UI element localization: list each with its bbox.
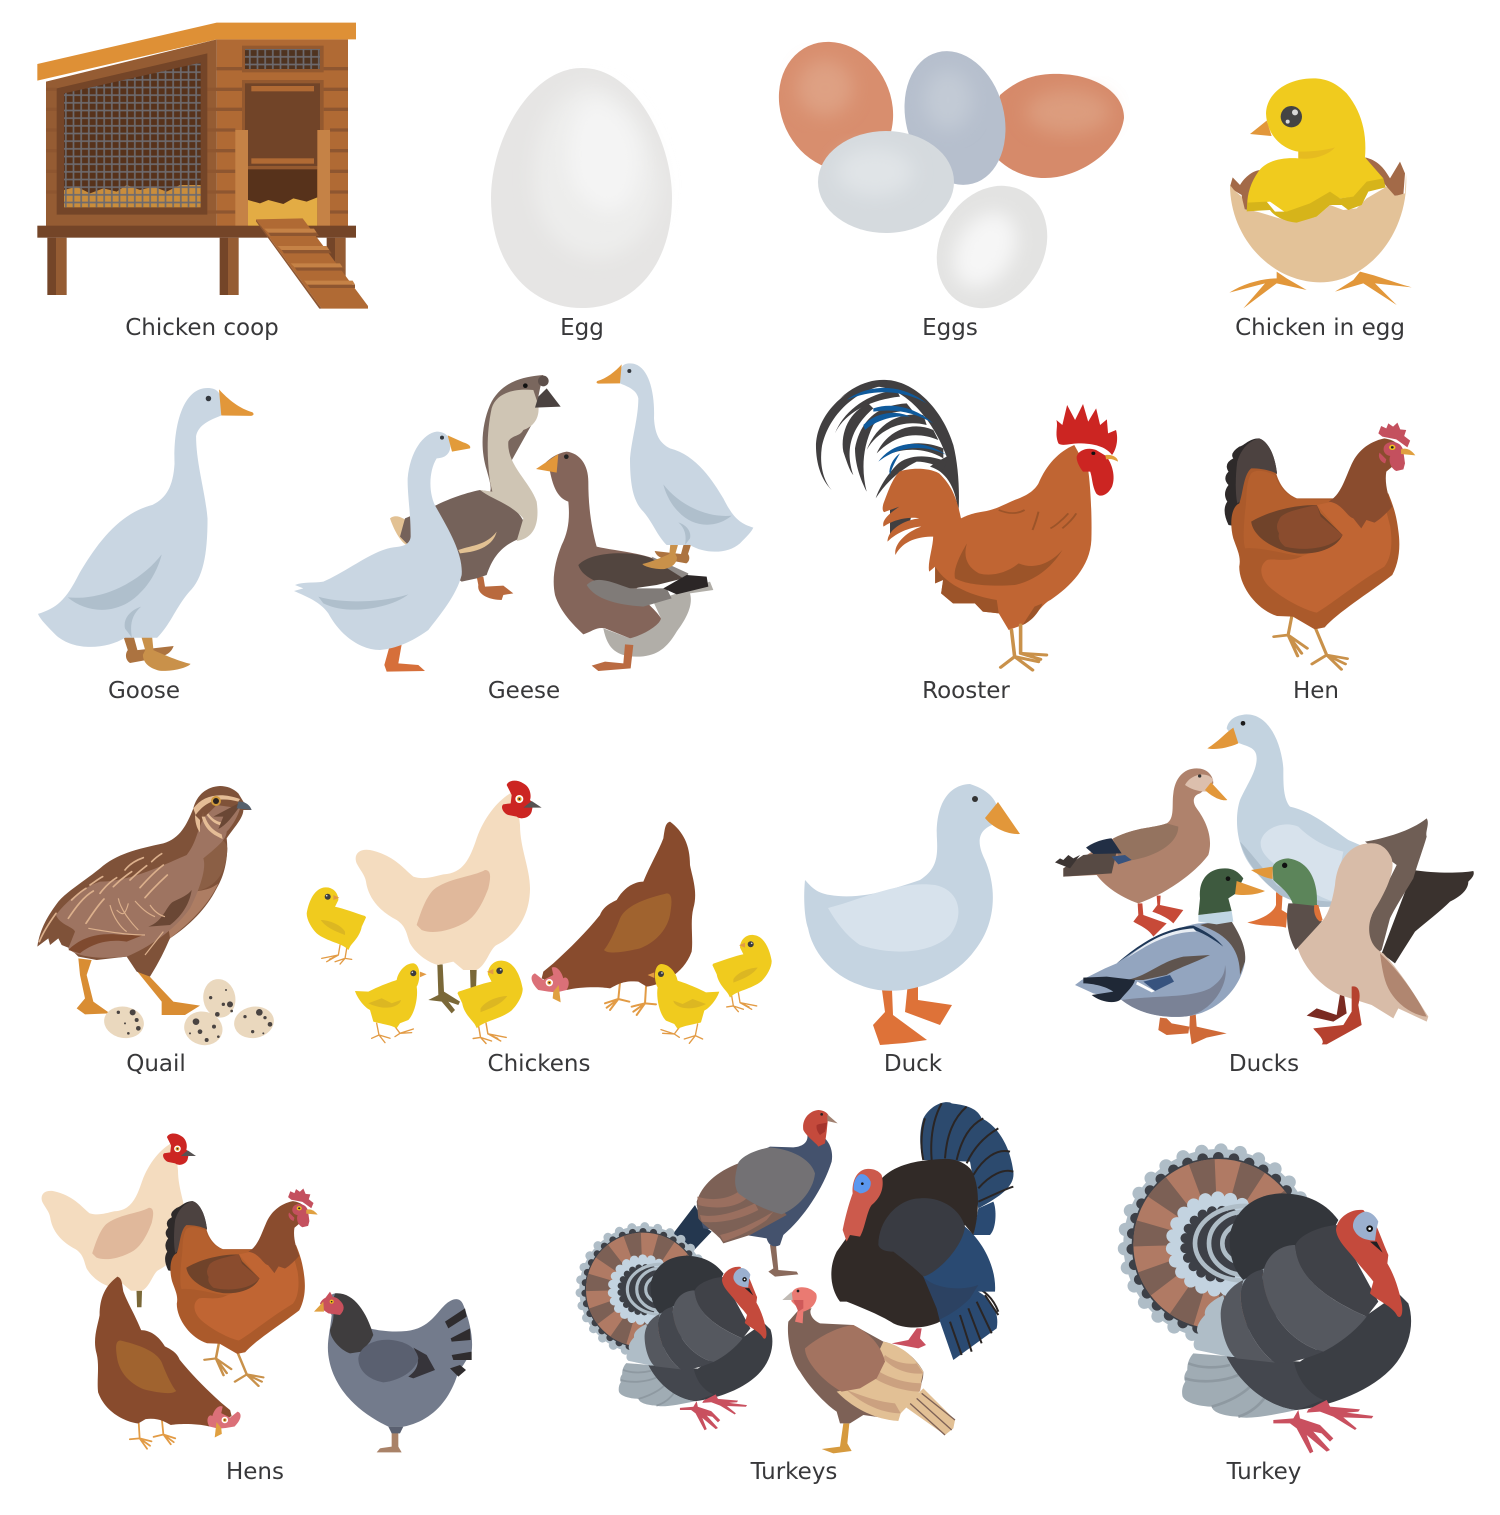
panel: duck [804,784,1020,1077]
panel: chicken in egg [1229,78,1412,341]
label: chicken in egg: Chicken in egg [1235,315,1405,341]
panel: turkeys [579,1102,1013,1485]
rooster [816,380,1118,670]
chick: far left [307,887,366,964]
label: turkeys: Turkeys [750,1459,837,1485]
label: eggs: Eggs [922,315,978,341]
white goose [38,388,254,671]
label: hen: Hen [1293,678,1339,704]
label: rooster: Rooster [922,678,1010,704]
panel: chicken coop [37,23,368,341]
dark turkey, small [579,1226,772,1430]
chick: front left [355,963,427,1043]
panel: rooster [816,380,1118,704]
quail with eggs [37,786,276,1049]
cream hen [42,1133,196,1327]
grey-winged turkey [673,1110,838,1277]
label: egg: Egg [560,315,604,341]
tan turkey [782,1287,955,1453]
label: turkey: Turkey [1226,1459,1301,1485]
dark turkey [1123,1149,1411,1453]
coop illustration [37,23,368,309]
panel: geese [294,363,753,704]
flock of geese [294,363,753,672]
panel: turkey [1123,1149,1411,1485]
label: goose: Goose [108,678,180,704]
panel: goose [38,388,254,704]
panel: quail [37,786,276,1077]
chick: front centre [457,961,523,1044]
grey hen [314,1292,472,1452]
label: chicken coop: Chicken coop [125,315,279,341]
label: hens: Hens [226,1459,284,1485]
panel: hen [1225,423,1415,704]
panel: egg [491,68,672,341]
label: geese: Geese [488,678,560,704]
label: quail: Quail [126,1051,186,1077]
white duck [804,784,1020,1045]
label: duck: Duck [884,1051,943,1077]
label: ducks: Ducks [1229,1051,1299,1077]
group of eggs [758,23,1124,328]
black and blue turkey [831,1102,1013,1360]
panel: eggs [758,23,1124,341]
label: chickens: Chickens [488,1051,590,1077]
brown pecking hen [532,822,695,1015]
flock of ducks [1055,714,1474,1044]
panel: ducks [1055,714,1474,1077]
panel: hens [42,1133,472,1485]
chick hatching from egg [1229,78,1412,308]
cream hen [356,781,542,1013]
orange hen [165,1189,318,1386]
panel: chickens [307,781,772,1077]
orange hen [1225,423,1415,669]
white egg [491,68,672,308]
chick: front right [648,964,719,1043]
brown hen pecking [95,1277,241,1449]
chick: far right [712,935,772,1012]
